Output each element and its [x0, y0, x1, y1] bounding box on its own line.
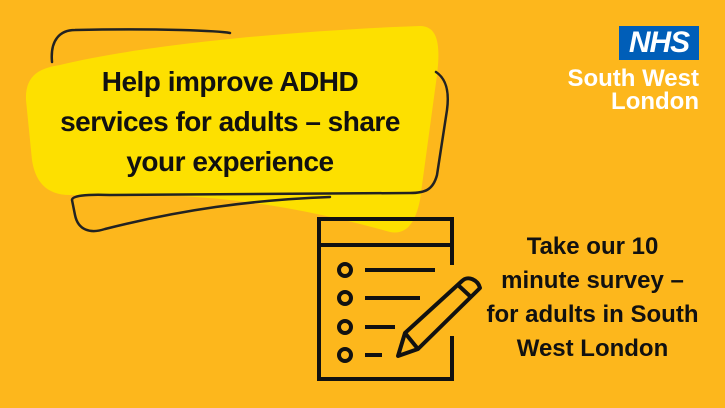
heading: Help improve ADHD — [102, 66, 358, 97]
org name: London — [611, 88, 699, 115]
survey text: Take our 10 — [527, 233, 658, 260]
icon: clipboard survey — [319, 219, 480, 379]
heading: services for adults – share — [60, 106, 400, 137]
yellow blob — [26, 26, 438, 233]
org name — [567, 65, 699, 115]
survey text: minute survey – — [501, 267, 684, 294]
NHS logo: NHS — [629, 26, 689, 59]
heading — [60, 66, 400, 177]
org name: South West — [567, 65, 699, 92]
black outline — [52, 29, 448, 231]
icon: pencil — [398, 278, 480, 356]
survey text: West London — [517, 335, 668, 362]
heading: your experience — [126, 146, 334, 177]
survey text — [486, 233, 698, 362]
survey text: for adults in South — [486, 301, 698, 328]
